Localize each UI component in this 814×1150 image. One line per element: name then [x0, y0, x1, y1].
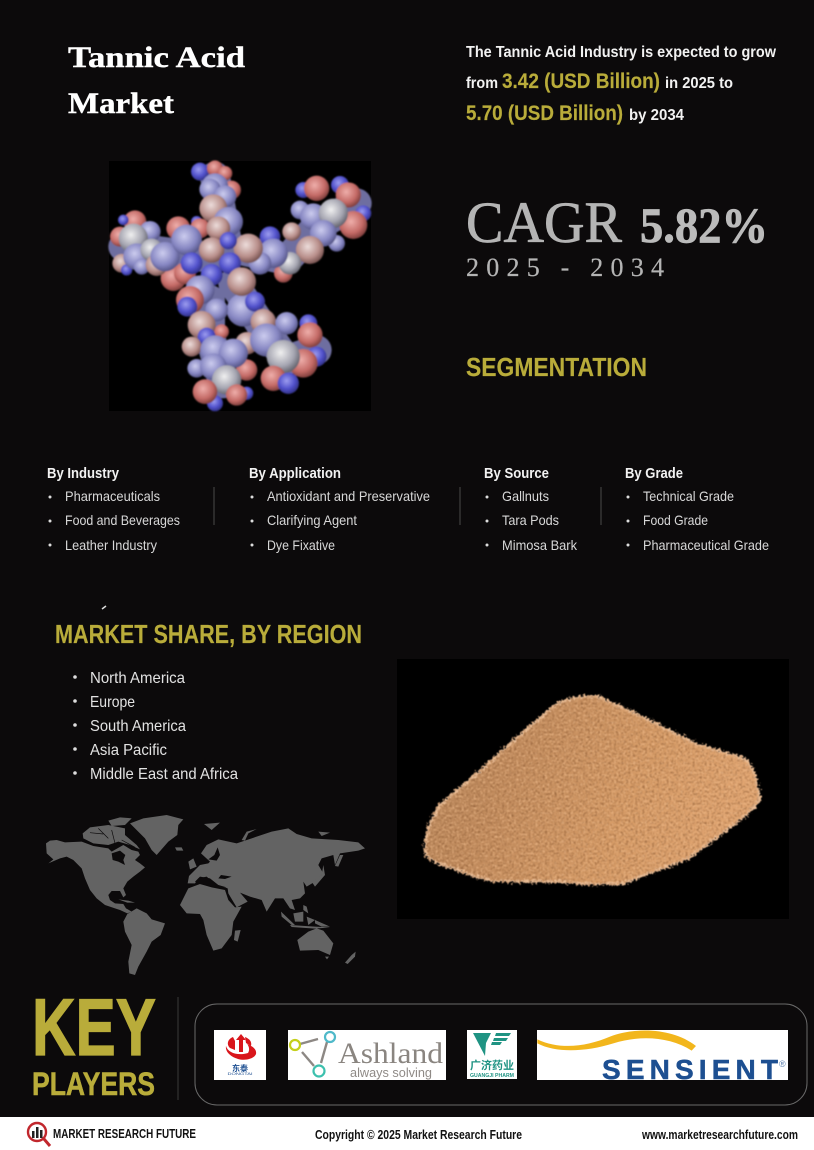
logo: Sensient: ®	[779, 1059, 786, 1069]
segment: by industry: Leather Industry	[65, 537, 157, 553]
region list: Asia Pacific	[90, 742, 167, 759]
CAGR	[466, 190, 768, 282]
segment: by application: Clarifying Agent	[267, 512, 357, 528]
segment: by grade	[625, 465, 769, 553]
segment: by grade: Technical Grade	[643, 488, 734, 504]
growth summary text: The Tannic Acid Industry is expected to grow	[466, 44, 776, 61]
segment: by application: Dye Fixative	[267, 537, 335, 553]
eurasia africa and oceania	[180, 823, 365, 964]
segment: by source: By Source	[484, 465, 549, 482]
segment: by industry	[47, 465, 180, 553]
segment: by application: Antioxidant and Preservative	[267, 488, 430, 504]
footer: Copyright © 2025 Market Research Future	[315, 1128, 522, 1142]
segment: by grade: By Grade	[625, 465, 683, 482]
heading: key players: KEY	[32, 983, 156, 1073]
growth summary text: from	[466, 75, 498, 92]
growth summary text: 5.70 (USD Billion)	[466, 102, 623, 125]
CAGR: 2025 - 2034	[466, 253, 664, 282]
segment: by grade: Food Grade	[643, 512, 708, 528]
logo: Sensient	[537, 1030, 788, 1085]
logo: Guangji Pharm	[467, 1030, 517, 1079]
logo: Ashland: always solving	[350, 1065, 432, 1080]
panel: molecule image	[109, 160, 371, 411]
growth summary text: by 2034	[629, 107, 684, 124]
segment: by source	[484, 465, 578, 553]
segment: by application	[249, 465, 430, 553]
panel: powder image	[397, 659, 789, 919]
molecule spheres	[110, 160, 371, 411]
heading: key players	[32, 983, 156, 1102]
growth summary text: in 2025 to	[665, 75, 733, 92]
powder pile	[425, 696, 760, 884]
CAGR: 5.82%	[640, 197, 768, 253]
segment: by source: Tara Pods	[502, 512, 559, 528]
segment: by source: Mimosa Bark	[502, 537, 578, 553]
region list: Middle East and Africa	[90, 766, 238, 783]
heading: key players: PLAYERS	[32, 1066, 155, 1102]
logo: Guangji Pharm: GUANGJI PHARM	[470, 1073, 514, 1079]
region list: South America	[90, 718, 186, 735]
segment: by industry: Food and Beverages	[65, 512, 180, 528]
region list	[73, 670, 238, 783]
logo: Sensient: SENSIENT	[602, 1054, 778, 1085]
logo: Dongtai: DONGTAI	[228, 1072, 253, 1076]
logo: Ashland	[288, 1030, 446, 1080]
title: Tannic Acid	[68, 41, 245, 74]
panel: key player logos	[195, 1004, 807, 1105]
growth summary text	[466, 44, 776, 125]
title: Market	[68, 87, 174, 120]
heading: segmentation: SEGMENTATION	[466, 352, 647, 382]
logo: Dongtai: 东泰	[232, 1063, 248, 1073]
logo: Ashland: Ashland	[338, 1037, 443, 1070]
segment: by industry: By Industry	[47, 465, 120, 482]
footer logo	[28, 1123, 50, 1146]
americas and greenland	[46, 815, 183, 975]
region list: North America	[90, 670, 185, 687]
growth summary text: 3.42 (USD Billion)	[502, 70, 660, 93]
heading: market share by region: MARKET SHARE, BY REGION	[55, 619, 362, 649]
footer	[0, 1117, 814, 1150]
segment: by industry: Pharmaceuticals	[65, 488, 160, 504]
region list: Europe	[90, 694, 135, 711]
world map	[46, 815, 365, 975]
segment: by grade: Pharmaceutical Grade	[643, 537, 769, 553]
title	[68, 41, 245, 120]
segment: by source: Gallnuts	[502, 488, 549, 504]
logo: Guangji Pharm: 广济药业	[470, 1058, 514, 1072]
CAGR: CAGR	[466, 190, 622, 255]
footer: MARKET RESEARCH FUTURE	[53, 1127, 196, 1141]
logo: Dongtai	[214, 1030, 266, 1080]
segment: by application: By Application	[249, 465, 341, 482]
